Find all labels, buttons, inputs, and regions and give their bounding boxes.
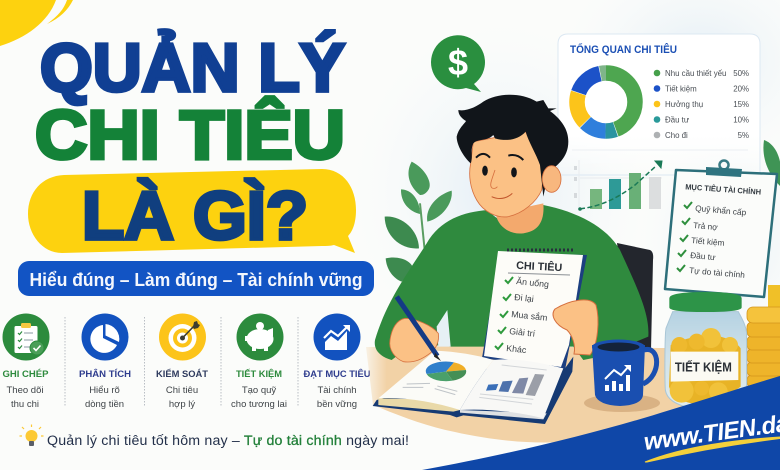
hair [457,95,568,197]
step: kiểm soát [156,314,208,410]
left hand with pen [390,297,441,362]
clipboard clip [706,160,742,177]
person [375,95,648,360]
legend: 20% [733,84,749,94]
legend: Hưởng thụ [665,100,703,109]
book pie chart [426,361,466,381]
desk [366,346,780,443]
description: chi tiêu hợp lý: hợp lý [169,399,195,410]
page stack right [460,410,547,419]
step: đạt mục tiêu [304,314,371,410]
gap between arm and torso [437,310,451,347]
description: tạo quỹ cho tương lai: Tạo quỹ [242,385,276,396]
legend: 5% [738,131,749,140]
notebook heading: CHI TIÊU [516,259,563,274]
dividers [65,317,298,407]
coin stack [747,307,780,387]
description: tài chính bền vững: Tài chính [317,385,357,396]
decoration: yellow corner blob [0,0,73,46]
icon: clipboard checklist [2,314,50,360]
body: sweater [375,203,648,360]
description: theo dõi thu chi: thu chi [11,399,39,410]
subtitle pill [18,261,374,296]
clipboard checklist: Quỹ khẩn cấp [695,203,747,217]
book cover [373,357,573,424]
legend: Cho đi [665,131,688,140]
pen [397,297,437,356]
nose [491,170,497,188]
plant: left [385,162,452,282]
left page [378,351,493,410]
jar lid [669,292,742,312]
right hand [553,300,598,355]
chair [617,243,653,350]
notebook checklist: Giải trí [509,326,536,339]
icon: pie chart [82,314,128,360]
notebook checklist: Đi lại [514,292,534,304]
yellow swoosh [645,437,780,462]
donut chart [577,73,635,131]
description: theo dõi thu chi: Theo dõi [7,385,43,396]
clipboard checklist: Tự do tài chính [689,265,746,280]
clipboard heading: MỤC TIÊU TÀI CHÍNH [685,182,762,197]
notebook: chi tiêu [482,250,587,370]
legend: 50% [733,69,749,78]
tagline: Quản lý chi tiêu tốt hôm nay – Tự do tài chính ngày mai! [47,433,409,449]
label: kiểm soát: KIỂM SOÁT [156,368,208,380]
jar coins [669,328,741,404]
legend: 15% [733,100,749,109]
step: tiết kiệm [231,314,287,410]
brows [476,154,490,158]
notebook checklist: Ăn uống [516,276,550,289]
clipboard checklist [677,202,747,280]
icon: piggy bank [236,314,284,360]
book bar chart [486,374,544,396]
mouth [492,193,512,199]
banner: website [422,376,780,470]
step: ghi chép [2,314,50,410]
plant: right [763,140,780,307]
clipboard: financial goals [665,160,777,297]
clipboard checklist: Đầu tư [690,250,716,262]
label: đạt mục tiêu: ĐẠT MỤC TIÊU [304,368,371,380]
description: chi tiêu hợp lý: Chi tiêu [166,385,198,396]
face [470,132,544,217]
mini bar chart with trend arrow [574,160,662,211]
jar label: TIẾT KIỆM [675,360,732,375]
subtitle pill: Hiểu đúng – Làm đúng – Tài chính vững [30,269,362,290]
label: ghi chép: GHI CHÉP [2,369,49,380]
page stack left [378,398,460,412]
title line: Quản lý: QUẢN LÝ [40,29,345,106]
legend: Đầu tư [665,116,690,124]
description: hiểu rõ dòng tiền: dòng tiền [85,399,124,410]
legend: 10% [733,116,749,124]
coffee mug [584,340,660,412]
notebook checklist: Mua sắm [511,309,548,323]
legend [654,69,749,140]
panel: spending overview [558,34,760,211]
notebook checklist [495,276,550,355]
neck [496,203,544,234]
dollar speech bubble: $ [448,42,468,83]
open book [373,351,573,424]
title line: Chi tiêu: CHI TIÊU [35,96,345,174]
title line: Là gì: LÀ GÌ? [82,178,308,254]
description: tài chính bền vững: bền vững [317,399,357,410]
icon: light bulb [20,424,44,446]
hand [390,318,439,362]
notebook checklist: Khác [506,343,527,355]
head [457,95,568,217]
panel heading: TỔNG QUAN CHI TIÊU [570,43,677,56]
yellow speech bubble [28,169,356,253]
ear [542,166,561,192]
description: hiểu rõ dòng tiền: Hiểu rõ [89,385,120,396]
label: phân tích: PHÂN TÍCH [79,368,131,380]
icon: target with dart [159,314,206,360]
mug chart icon [605,365,631,391]
jar glass [665,312,747,409]
right page [460,359,563,418]
step: phân tích [79,314,131,410]
legend: Nhu cầu thiết yếu [665,69,726,78]
label: tiết kiệm: TIẾT KIỆM [236,368,282,380]
clipboard checklist: Tiết kiệm [691,235,725,248]
eyes [482,166,488,176]
savings jar [665,292,747,409]
legend: Tiết kiệm [665,84,697,94]
icon: growth chart [314,314,360,360]
title: Quản lý chi tiêu là gì [28,29,356,254]
dollar speech bubble [431,35,485,92]
description: tạo quỹ cho tương lai: cho tương lai [231,399,287,410]
clipboard checklist: Trả nợ [693,220,719,232]
